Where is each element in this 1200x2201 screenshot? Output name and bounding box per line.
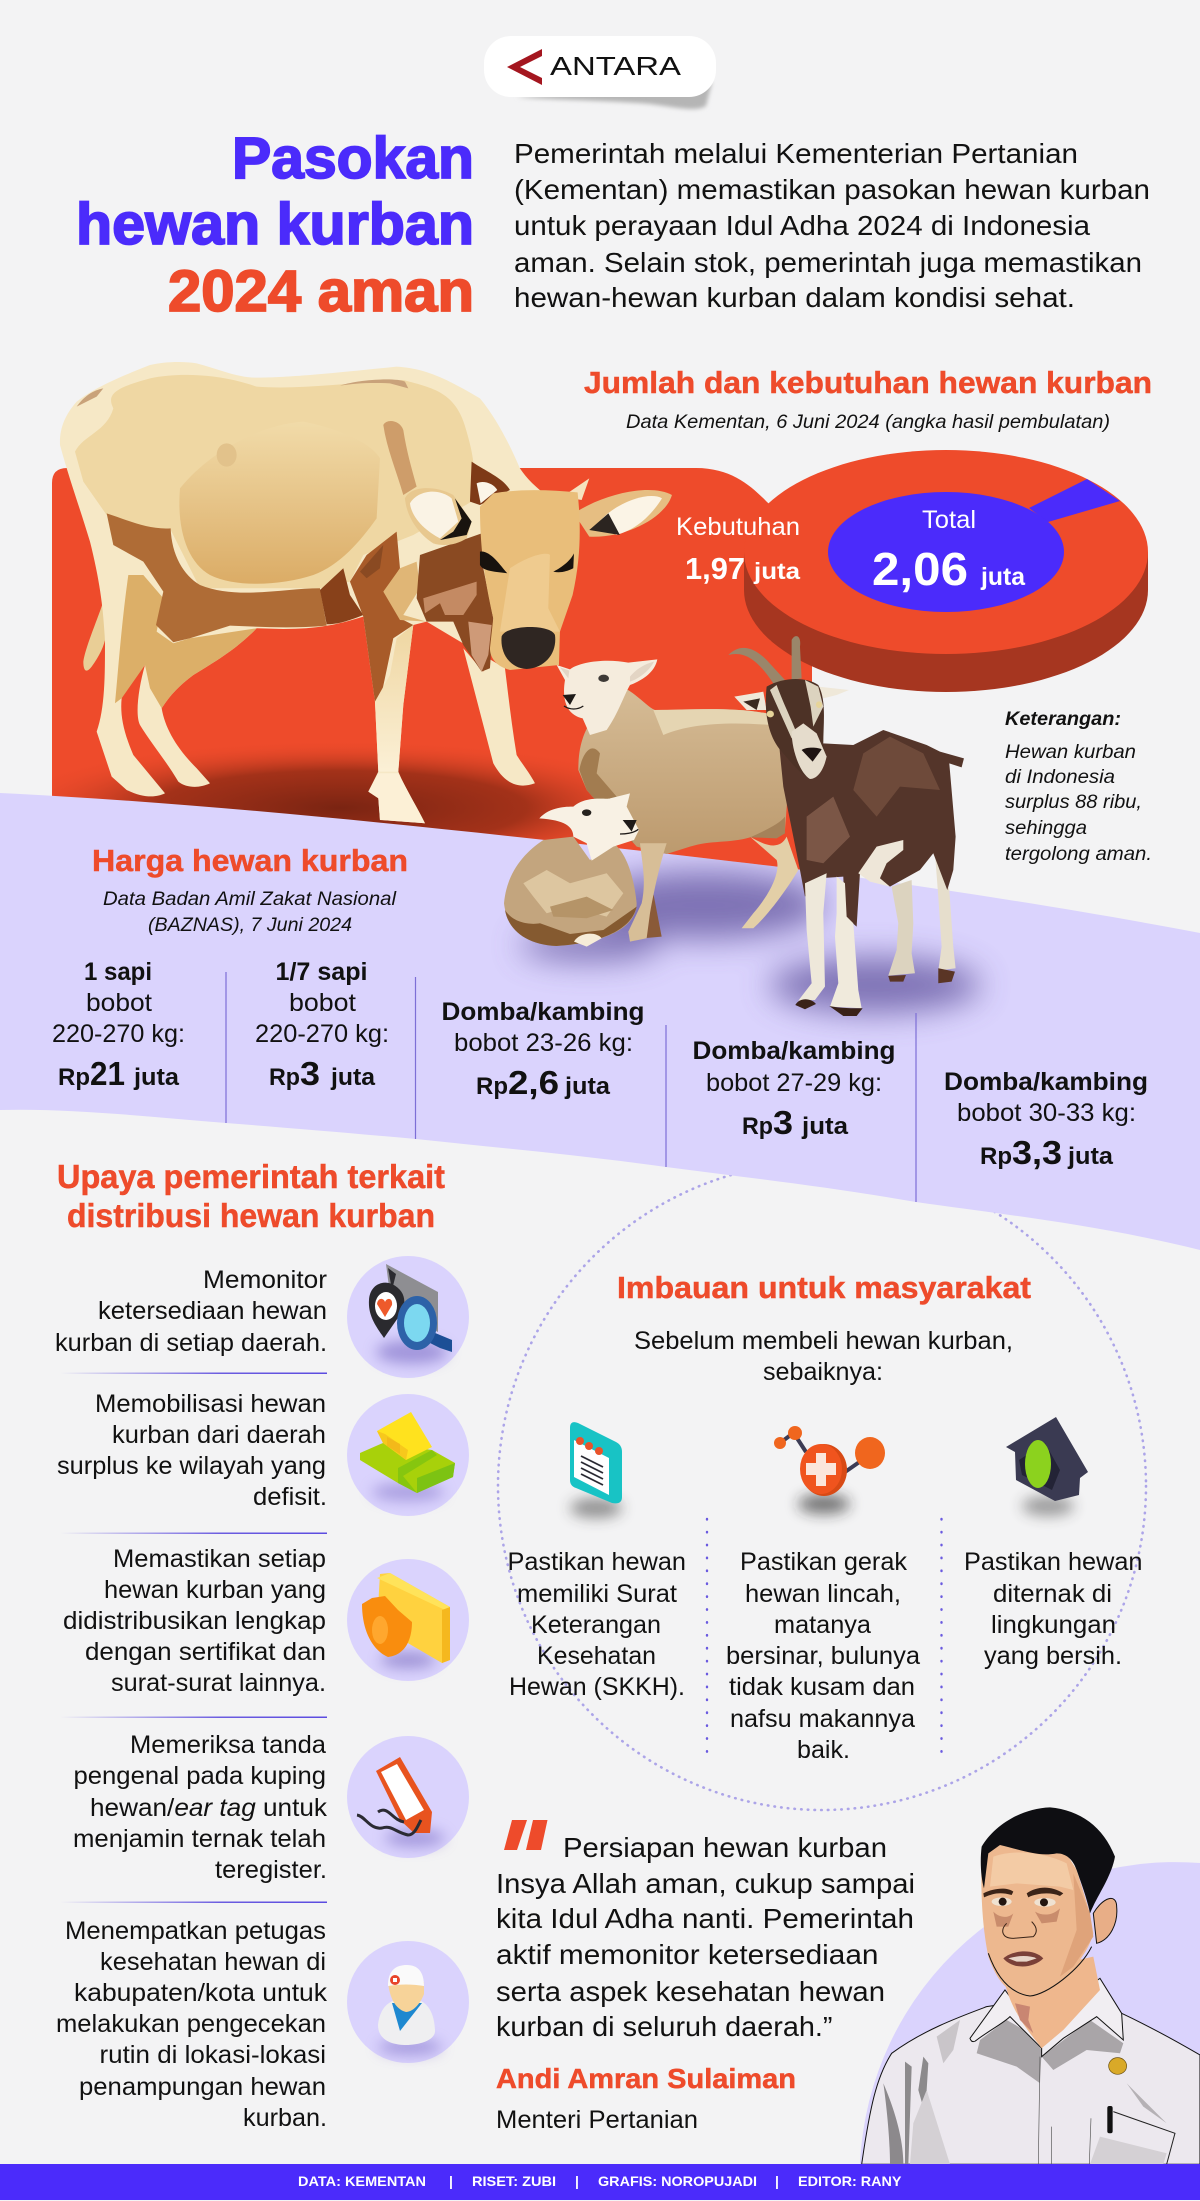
price: 1/7 sapi: bobot — [289, 989, 356, 1017]
footer credits bar — [0, 2164, 1200, 2200]
imbauan column 2: hewan lincah, — [745, 1580, 901, 1608]
title — [76, 126, 474, 324]
source: data kementan: Data Kementan, 6 Juni 2024 (angka hasil pembulatan) — [626, 412, 1110, 433]
pie chart: kebutuhan vs total: 1,97 — [685, 551, 745, 586]
icon: leaf house — [1006, 1417, 1088, 1516]
icon: veterinarian — [347, 1941, 469, 2063]
dotted column dividers — [707, 1519, 942, 1756]
heading: upaya pemerintah — [57, 1158, 445, 1234]
quote text: kurban di seluruh daerah.” — [496, 2011, 832, 2042]
price: 1/7 sapi: Rp — [269, 1064, 300, 1091]
price: domba/kambing 23-26 kg: juta — [564, 1073, 611, 1100]
list item 3 text: dengan sertifikat dan — [85, 1638, 326, 1666]
footer credits bar: DATA: KEMENTAN — [298, 2173, 426, 2189]
imbauan column 2: nafsu makannya — [730, 1705, 915, 1733]
pie chart: kebutuhan vs total — [676, 450, 1148, 692]
imbauan column 1: memiliki Surat — [517, 1580, 677, 1608]
minister backdrop circle — [860, 1862, 1200, 2164]
imbauan column 2: baik. — [797, 1736, 850, 1764]
list item 4 text — [73, 1731, 328, 1884]
icon: house on land — [347, 1394, 469, 1516]
list item 4 text: menjamin ternak telah — [73, 1825, 326, 1853]
list item 1 text — [55, 1266, 327, 1357]
list item 2 text: defisit. — [253, 1483, 327, 1511]
imbauan lead text: Sebelum membeli hewan kurban, — [634, 1327, 1013, 1355]
quote attribution: Menteri Pertanian — [496, 2106, 698, 2134]
list item 4 text: pengenal pada kuping — [74, 1762, 326, 1790]
illustration: standing sheep — [557, 659, 798, 942]
price: 1/7 sapi: 220-270 kg: — [255, 1020, 389, 1048]
quote text — [496, 1832, 915, 2042]
imbauan column 3: yang bersih. — [984, 1642, 1122, 1670]
price: domba/kambing 30-33 kg: juta — [1067, 1143, 1114, 1170]
logo: ANTARA badge — [484, 36, 716, 109]
price: domba/kambing 27-29 kg: juta — [801, 1113, 849, 1140]
list item 5 text: kabupaten/kota untuk — [74, 1979, 328, 2007]
price: 1/7 sapi: 3 — [300, 1055, 320, 1092]
imbauan column 2 — [726, 1548, 920, 1764]
footer credits bar: | — [775, 2173, 779, 2189]
price: domba/kambing 23-26 kg: bobot 23-26 kg: — [454, 1029, 633, 1057]
price: domba/kambing 23-26 kg: Rp — [476, 1073, 508, 1100]
heading: jumlah dan kebutuhan: Jumlah dan kebutuhan hewan kurban — [584, 365, 1152, 400]
imbauan column 2: Pastikan gerak — [740, 1548, 907, 1576]
imbauan column 3: diternak di — [993, 1580, 1112, 1608]
imbauan column 2: bersinar, bulunya — [726, 1642, 920, 1670]
price: domba/kambing 30-33 kg: Domba/kambing — [944, 1068, 1148, 1096]
imbauan lead text: sebaiknya: — [763, 1358, 883, 1386]
list item 2 text — [57, 1390, 327, 1511]
price: domba/kambing 23-26 kg: Domba/kambing — [442, 998, 644, 1026]
animal shadows — [520, 871, 980, 1013]
footer credits bar: EDITOR: RANY — [798, 2173, 902, 2189]
quote text: kita Idul Adha nanti. Pemerintah — [496, 1903, 914, 1934]
pie chart: kebutuhan vs total: juta — [980, 563, 1026, 591]
price: 1 sapi: Rp — [58, 1064, 90, 1091]
price: 1/7 sapi: 1/7 sapi — [276, 958, 368, 986]
price: domba/kambing 30-33 kg: Rp — [980, 1143, 1012, 1170]
list item 2 text: Memobilisasi hewan — [95, 1390, 326, 1418]
pie chart: kebutuhan vs total: Kebutuhan — [676, 513, 800, 541]
imbauan column 1: Keterangan — [531, 1611, 661, 1639]
icon: notebook — [570, 1422, 622, 1518]
pie chart: kebutuhan vs total: juta — [753, 558, 800, 584]
imbauan column 2: tidak kusam dan — [729, 1673, 915, 1701]
list item 1 text: kurban di setiap daerah. — [55, 1329, 327, 1357]
list item 5 text: melakukan pengecekan — [56, 2010, 326, 2038]
list item 2 text: kurban dari daerah — [112, 1421, 326, 1449]
keterangan note: di Indonesia — [1005, 767, 1115, 788]
heading: upaya pemerintah: distribusi hewan kurban — [67, 1197, 435, 1234]
illustration: cow — [60, 362, 672, 823]
imbauan column 3: lingkungan — [991, 1611, 1116, 1639]
price: 1 sapi: 220-270 kg: — [52, 1020, 185, 1048]
price: domba/kambing 27-29 kg — [692, 1037, 896, 1141]
heading: harga hewan kurban: Harga hewan kurban — [92, 843, 408, 878]
price: domba/kambing 23-26 kg — [442, 998, 644, 1101]
price: domba/kambing 27-29 kg: bobot 27-29 kg: — [706, 1069, 882, 1097]
quote text: Insya Allah aman, cukup sampai — [496, 1868, 915, 1899]
source: baznas: (BAZNAS), 7 Juni 2024 — [148, 915, 352, 936]
icon: map pin and magnifier — [347, 1256, 469, 1378]
imbauan column 1 — [508, 1548, 686, 1701]
heading: upaya pemerintah: Upaya pemerintah terkait — [57, 1158, 445, 1195]
heading: imbauan: Imbauan untuk masyarakat — [617, 1270, 1031, 1305]
source: baznas — [103, 889, 397, 936]
footer credits bar: | — [575, 2173, 579, 2189]
price: 1 sapi: 21 — [90, 1055, 125, 1092]
quote text: Persiapan hewan kurban — [563, 1832, 887, 1863]
illustration: lying lamb — [504, 793, 639, 947]
imbauan column 1: Hewan (SKKH). — [509, 1673, 685, 1701]
price: 1 sapi: juta — [133, 1064, 180, 1091]
list item 5 text: rutin di lokasi-lokasi — [100, 2041, 326, 2069]
price: domba/kambing 27-29 kg: 3 — [773, 1104, 793, 1141]
intro text block: aman. Selain stok, pemerintah juga memastikan — [514, 247, 1142, 278]
quote text: serta aspek kesehatan hewan — [496, 1976, 885, 2007]
source: baznas: Data Badan Amil Zakat Nasional — [103, 889, 397, 910]
list item 5 text — [56, 1917, 328, 2132]
panel: lavender price band — [0, 793, 1200, 1250]
portrait: minister — [862, 1807, 1200, 2164]
keterangan note: Keterangan: — [1005, 709, 1121, 730]
quote attribution: Andi Amran Sulaiman — [496, 2063, 796, 2094]
list item 3 text: didistribusikan lengkap — [63, 1607, 326, 1635]
imbauan column 3: Pastikan hewan — [964, 1548, 1142, 1576]
keterangan note: sehingga — [1005, 818, 1087, 839]
price: domba/kambing 27-29 kg: Domba/kambing — [692, 1037, 896, 1065]
keterangan note: surplus 88 ribu, — [1005, 792, 1142, 813]
footer credits bar: | — [449, 2173, 453, 2189]
price: 1 sapi: 1 sapi — [84, 958, 152, 986]
price: domba/kambing 30-33 kg: 3,3 — [1012, 1134, 1062, 1171]
list item 3 text — [63, 1545, 326, 1697]
footer credits bar: GRAFIS: NOROPUJADI — [598, 2173, 757, 2189]
title: 2024 aman — [168, 259, 474, 324]
icon: ear tag — [347, 1736, 469, 1858]
price: 1 sapi — [52, 958, 185, 1092]
price: domba/kambing 30-33 kg: bobot 30-33 kg: — [957, 1099, 1136, 1127]
list item 4 text: teregister. — [215, 1856, 327, 1884]
price: 1/7 sapi: juta — [330, 1064, 376, 1091]
list item 5 text: kurban. — [243, 2104, 327, 2132]
price: 1/7 sapi — [255, 958, 389, 1092]
keterangan note — [1005, 709, 1152, 865]
price: domba/kambing 23-26 kg: 2,6 — [508, 1064, 559, 1101]
footer credits bar: RISET: ZUBI — [472, 2173, 556, 2189]
intro text block — [514, 138, 1150, 313]
logo: ANTARA badge: ANTARA — [550, 51, 682, 81]
list item 4 text: hewan/ear tag untuk — [90, 1794, 328, 1822]
list item 5 text: penampungan hewan — [79, 2073, 326, 2101]
intro text block: untuk perayaan Idul Adha 2024 di Indonesia — [514, 210, 1090, 241]
illustration: goat — [728, 636, 964, 1016]
pie chart: kebutuhan vs total: Total — [922, 506, 976, 534]
intro text block: (Kementan) memastikan pasokan hewan kurban — [514, 174, 1150, 205]
price dividers — [226, 972, 916, 1202]
intro text block: hewan-hewan kurban dalam kondisi sehat. — [514, 282, 1075, 313]
quote attribution — [496, 2063, 796, 2134]
list item 5 text: kesehatan hewan di — [100, 1948, 326, 1976]
title: Pasokan — [232, 126, 474, 191]
quote mark — [504, 1820, 548, 1850]
price: domba/kambing 30-33 kg — [944, 1068, 1148, 1171]
imbauan column 2: matanya — [774, 1611, 871, 1639]
imbauan lead text — [634, 1327, 1013, 1386]
quote text: aktif memonitor ketersediaan — [496, 1939, 878, 1970]
icon: medical cross molecule — [774, 1426, 885, 1514]
list item 3 text: surat-surat lainnya. — [111, 1669, 326, 1697]
imbauan column 1: Kesehatan — [537, 1642, 656, 1670]
list item 3 text: hewan kurban yang — [104, 1576, 326, 1604]
imbauan column 3 — [964, 1548, 1142, 1670]
price: 1 sapi: bobot — [86, 989, 152, 1017]
list item 3 text: Memastikan setiap — [113, 1545, 326, 1573]
pie chart: kebutuhan vs total: 2,06 — [872, 543, 968, 595]
panel: red backdrop — [52, 468, 812, 870]
imbauan column 1: Pastikan hewan — [508, 1548, 686, 1576]
icon: shield and envelope — [347, 1559, 469, 1681]
intro text block: Pemerintah melalui Kementerian Pertanian — [514, 138, 1078, 169]
list item 2 text: surplus ke wilayah yang — [57, 1452, 326, 1480]
list item 1 text: ketersediaan hewan — [98, 1297, 327, 1325]
title: hewan kurban — [76, 192, 474, 257]
list item 5 text: Menempatkan petugas — [65, 1917, 326, 1945]
dotted circle: imbauan backdrop — [498, 1162, 1146, 1810]
keterangan note: Hewan kurban — [1005, 742, 1136, 763]
list item 4 text: Memeriksa tanda — [130, 1731, 326, 1759]
keterangan note: tergolong aman. — [1005, 844, 1152, 865]
price: domba/kambing 27-29 kg: Rp — [742, 1113, 773, 1140]
list item 1 text: Memonitor — [203, 1266, 327, 1294]
